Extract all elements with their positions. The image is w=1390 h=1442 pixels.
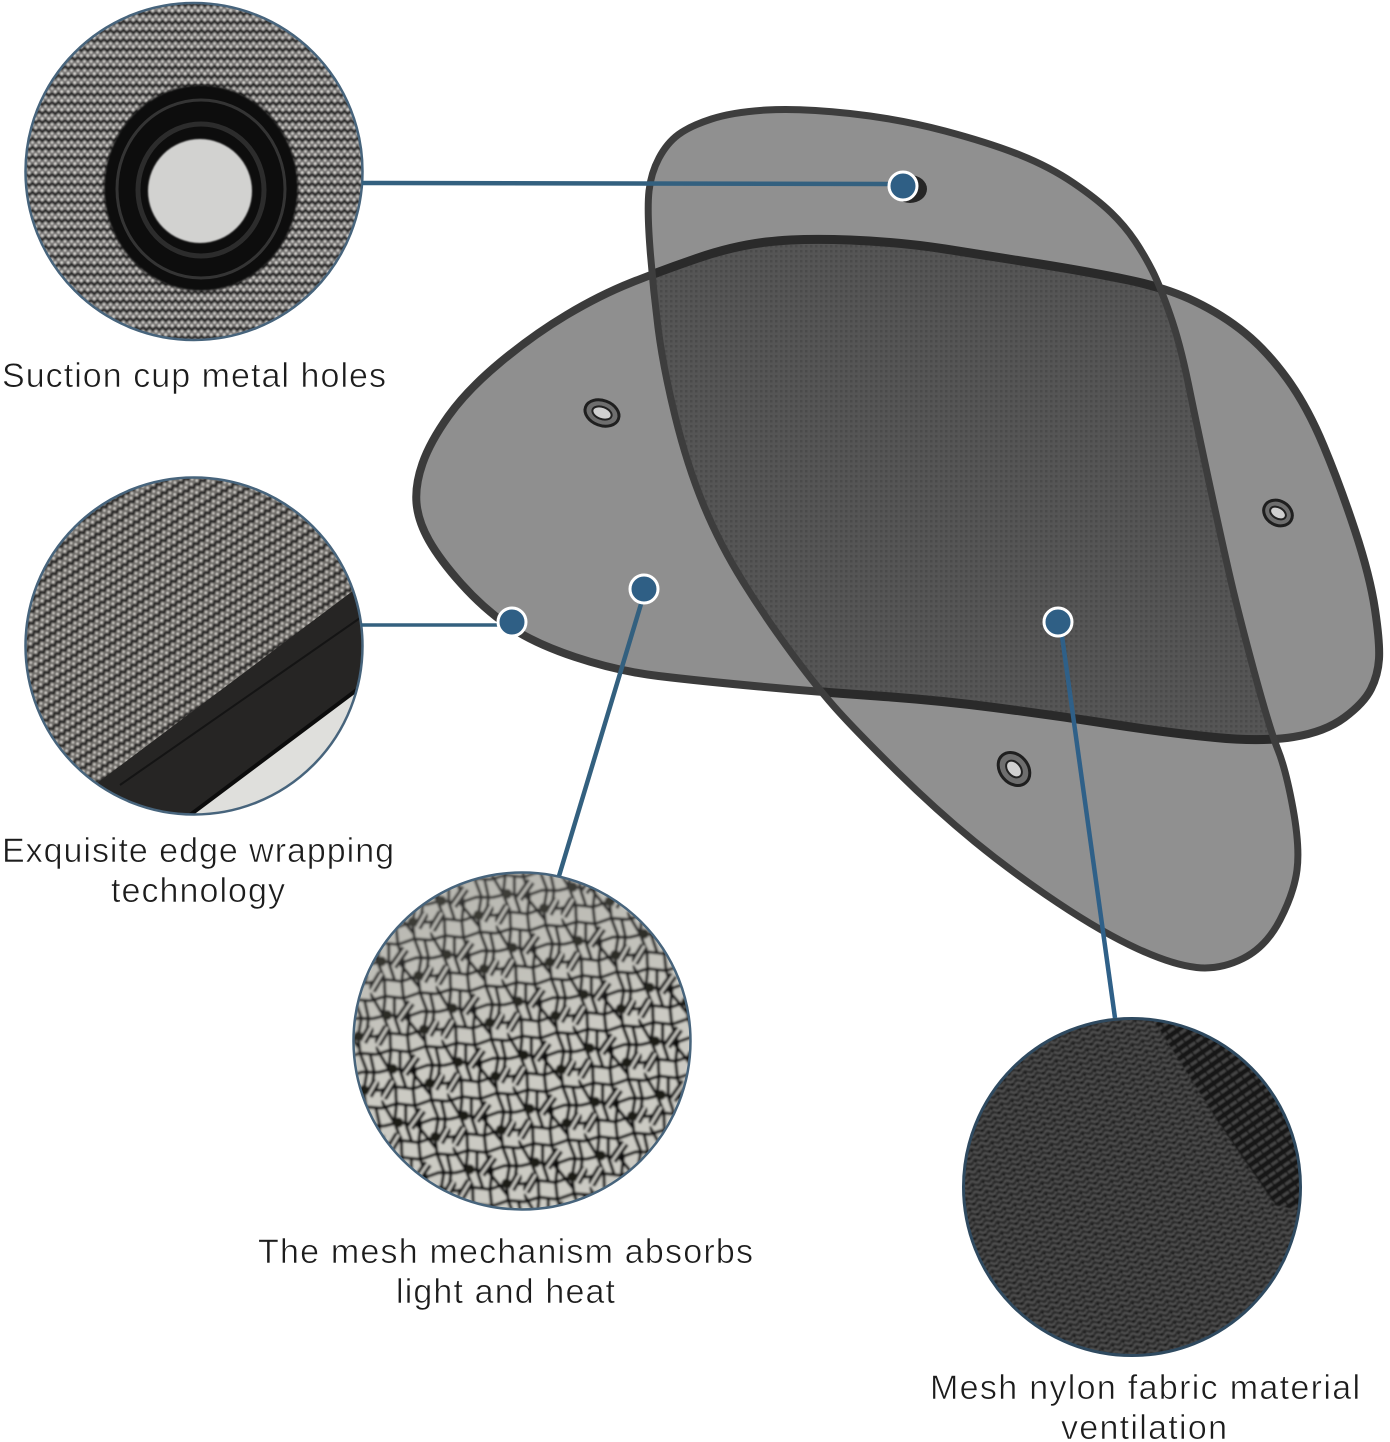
callout: suction cup metal holes — [2, 0, 917, 395]
caption: technology — [111, 872, 285, 910]
detail circle: open mesh close-up — [345, 865, 700, 1220]
connector line — [559, 604, 641, 876]
callout: mesh mechanism absorbs light and heat — [258, 575, 753, 1311]
connector line — [361, 623, 500, 627]
overlap: darker double-mesh area — [655, 234, 1272, 744]
marker dot — [889, 172, 917, 200]
caption: The mesh mechanism absorbs — [258, 1233, 753, 1271]
caption: Exquisite edge wrapping — [2, 832, 394, 870]
marker dot — [1044, 608, 1072, 636]
detail circle: nylon fabric close-up — [962, 1017, 1302, 1357]
marker dot — [630, 575, 658, 603]
grommet: right panel — [1259, 495, 1297, 531]
detail circle: suction cup close-up — [20, 0, 370, 345]
caption: Suction cup metal holes — [2, 357, 386, 395]
callout: mesh nylon fabric material ventilation — [930, 608, 1360, 1442]
connector line — [1062, 636, 1115, 1018]
product: two overlapping mesh sun shades — [416, 109, 1379, 968]
marker dot — [498, 608, 526, 636]
caption: light and heat — [396, 1273, 616, 1311]
shade: rear horizontal panel — [416, 239, 1379, 740]
connector line — [362, 183, 892, 184]
shade: front panel border — [648, 109, 1298, 968]
detail circle: wrapped edge close-up — [20, 470, 370, 830]
caption: Mesh nylon fabric material — [930, 1369, 1360, 1407]
grommet: top panel, behind marker — [893, 175, 927, 203]
grommet: left panel — [581, 395, 623, 431]
grommet: bottom panel — [992, 746, 1036, 792]
callout: exquisite edge wrapping technology — [2, 470, 526, 910]
shade: front vertical panel — [648, 109, 1298, 968]
